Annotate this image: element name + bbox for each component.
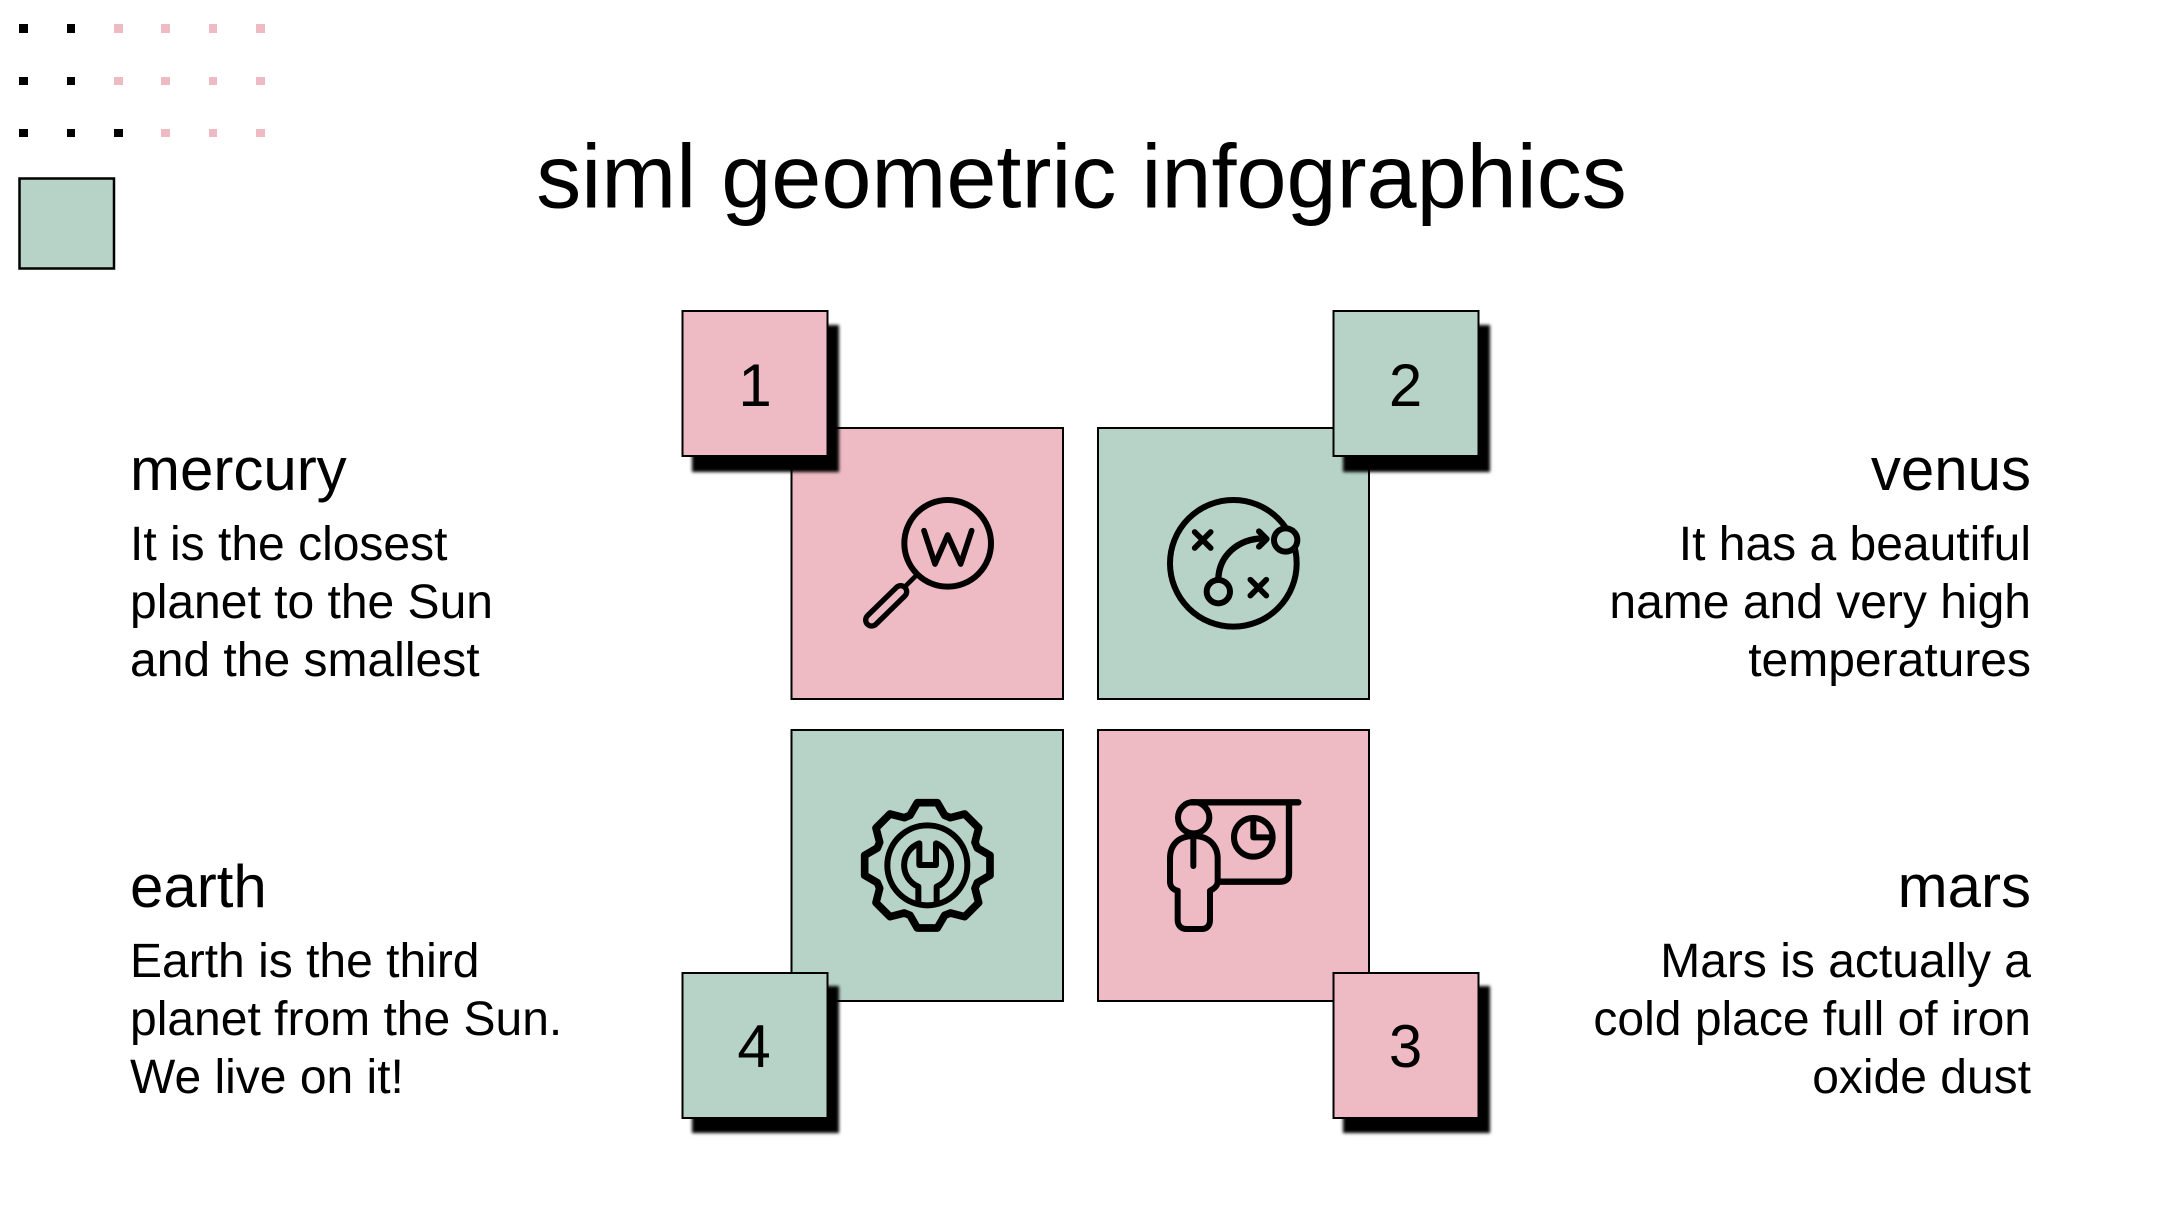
number badge 1: 1 bbox=[738, 352, 772, 419]
panel: mercury tile bbox=[792, 428, 1063, 699]
text block: venus: It has a beautiful bbox=[1679, 518, 2031, 571]
text block: venus: temperatures bbox=[1748, 634, 2031, 687]
text block: mars: cold place full of iron bbox=[1593, 993, 2031, 1046]
text block: venus: venus bbox=[1871, 436, 2031, 503]
text block: venus bbox=[1609, 436, 2031, 687]
decorative dot grid bbox=[19, 24, 265, 137]
text block: mercury: and the smallest bbox=[130, 634, 480, 687]
text block: mercury: mercury bbox=[130, 436, 347, 503]
number badge 2 bbox=[1334, 311, 1490, 472]
icon: magnifying glass with W bbox=[872, 500, 991, 620]
number badge 3 bbox=[1334, 973, 1490, 1133]
panel: venus tile bbox=[1098, 428, 1369, 699]
panel: mars tile bbox=[1098, 730, 1369, 1001]
text block: earth: earth bbox=[130, 853, 267, 920]
text block: mars bbox=[1593, 853, 2031, 1104]
number badge 4 bbox=[682, 973, 839, 1133]
text block: earth: planet from the Sun. bbox=[130, 993, 562, 1046]
text block: mars: oxide dust bbox=[1812, 1051, 2031, 1104]
text block: mercury: It is the closest bbox=[130, 518, 447, 571]
icon: gear with wrench bbox=[865, 803, 990, 928]
text block: earth: We live on it! bbox=[130, 1051, 404, 1104]
number badge 2: 2 bbox=[1389, 352, 1422, 419]
icon: presenter with pie chart bbox=[1170, 802, 1298, 929]
icon: strategy play circle bbox=[1170, 500, 1297, 627]
number badge 1 bbox=[682, 311, 839, 472]
text block: mercury: planet to the Sun bbox=[130, 576, 493, 629]
text block: earth bbox=[130, 853, 562, 1104]
decorative green square bbox=[20, 178, 114, 268]
text block: mars: Mars is actually a bbox=[1660, 935, 2031, 988]
number badge 3: 3 bbox=[1389, 1013, 1422, 1080]
number badge 4: 4 bbox=[737, 1013, 771, 1080]
text block: mercury bbox=[130, 436, 493, 687]
title: siml geometric infographics bbox=[536, 128, 1627, 228]
text block: earth: Earth is the third bbox=[130, 935, 480, 988]
text block: venus: name and very high bbox=[1609, 576, 2031, 629]
panel: earth tile bbox=[792, 730, 1063, 1001]
text block: mars: mars bbox=[1898, 853, 2031, 920]
